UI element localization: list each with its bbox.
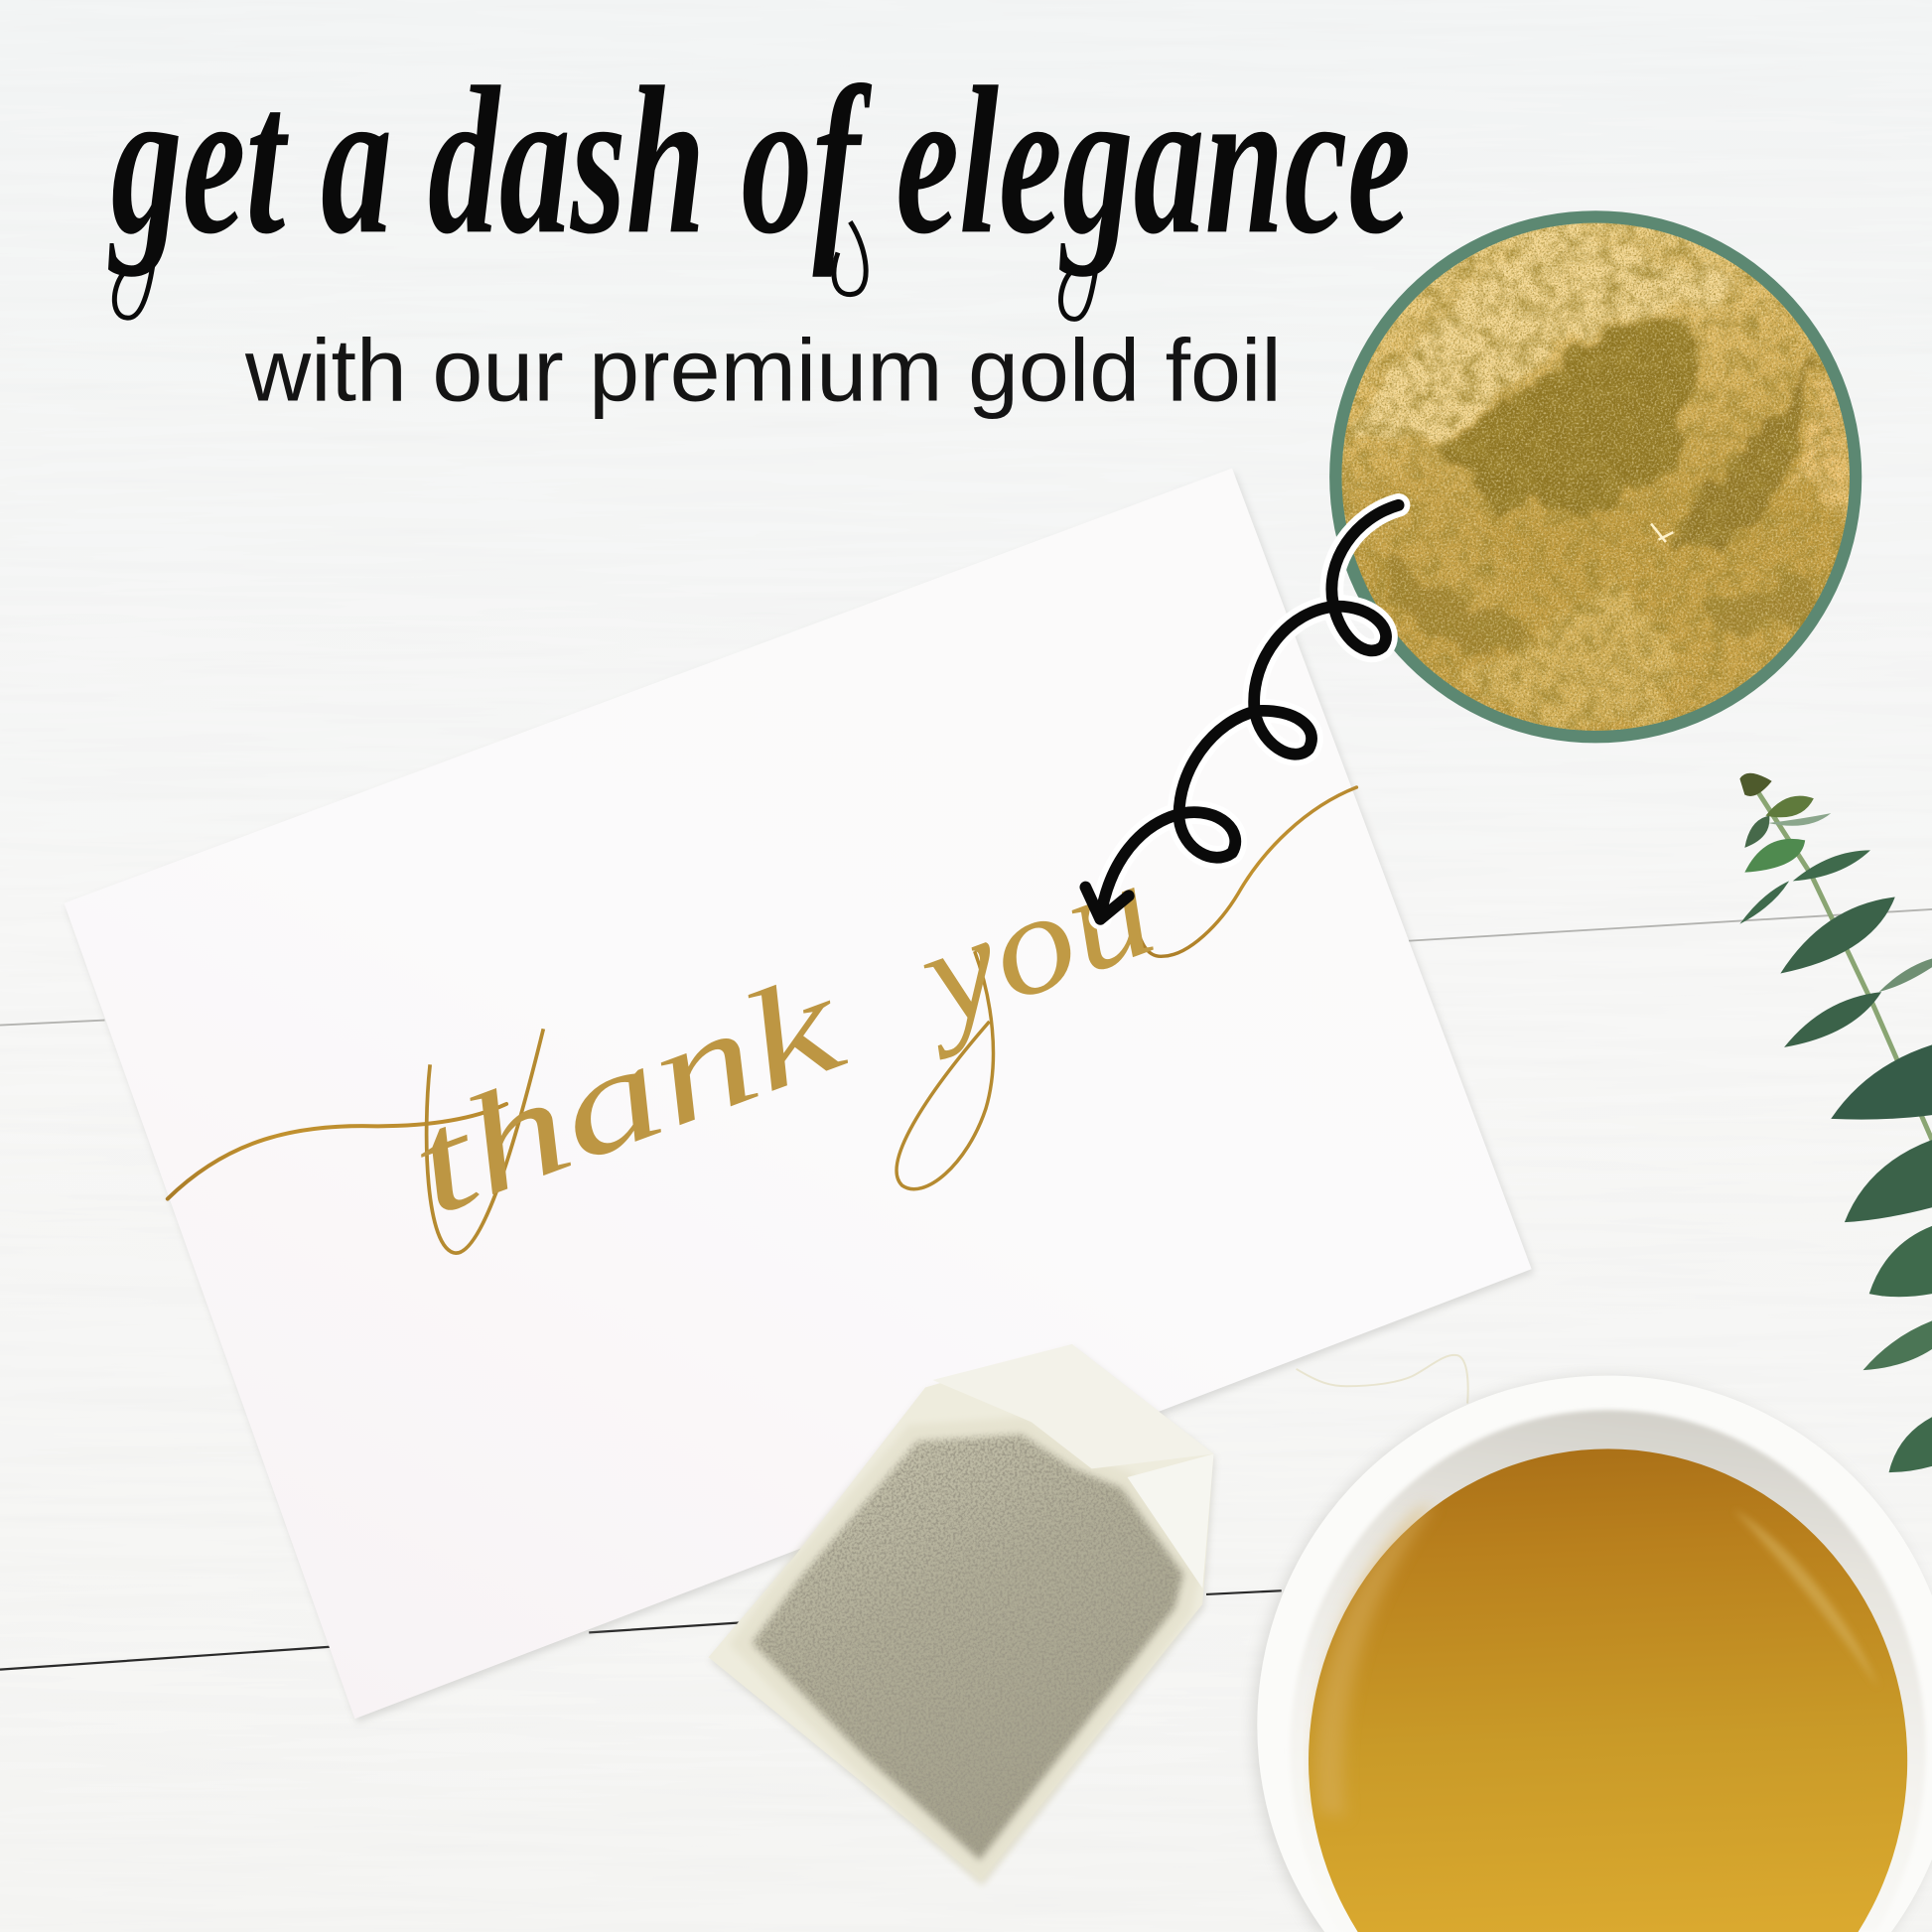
tea string bbox=[1297, 1355, 1468, 1404]
thank you card bbox=[65, 469, 1534, 1723]
gold swash left bbox=[168, 1104, 506, 1199]
tea reflection right bbox=[1733, 1509, 1879, 1688]
cup rim bbox=[1257, 1376, 1932, 1932]
gold foil text: thank: thank bbox=[390, 943, 864, 1245]
gold swash y tail bbox=[897, 951, 993, 1189]
cup inner wall bbox=[1290, 1410, 1926, 1932]
gold swash right bbox=[1131, 787, 1356, 956]
eucalyptus branch bbox=[1739, 773, 1932, 1472]
green ring bbox=[1329, 210, 1862, 743]
gold foil circle bbox=[1329, 210, 1862, 743]
leaves bbox=[1739, 773, 1932, 1472]
folded top flap bbox=[932, 1344, 1213, 1468]
tea bag bbox=[709, 1344, 1215, 1882]
curly arrow bbox=[1085, 505, 1399, 919]
card face bbox=[65, 469, 1532, 1719]
arrowhead bbox=[1085, 888, 1129, 919]
gold foil text: you: you bbox=[886, 828, 1173, 1061]
foil texture bbox=[1337, 219, 1861, 737]
paper edge bbox=[709, 1344, 1213, 1879]
title bbox=[108, 44, 1411, 319]
tea reflection left bbox=[1315, 1503, 1436, 1818]
tea liquid bbox=[1309, 1449, 1907, 1932]
tea cup bbox=[1254, 1376, 1932, 1932]
gold swash t tail bbox=[427, 1029, 543, 1253]
soft tea edge bbox=[741, 1426, 1192, 1872]
subtitle: with our premium gold foil bbox=[244, 320, 1282, 419]
tea contents bbox=[750, 1430, 1187, 1863]
stem bbox=[1756, 788, 1932, 1140]
folded side flap bbox=[1128, 1453, 1213, 1588]
